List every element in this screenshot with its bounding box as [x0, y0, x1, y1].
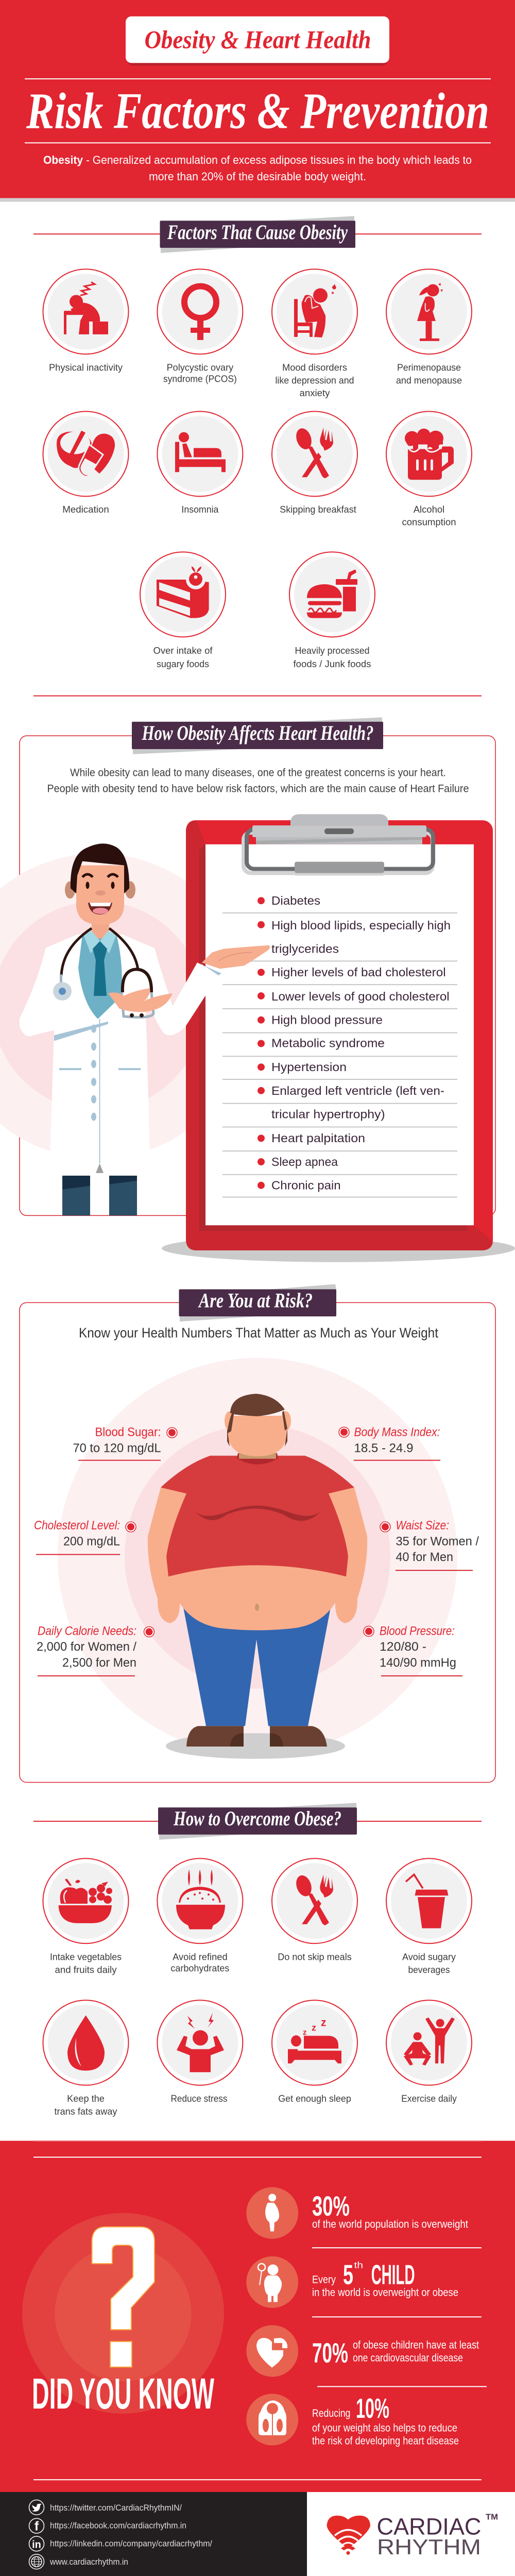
risk factor list: Enlarged left ventricle (left ven- — [271, 1084, 444, 1097]
linkedin link — [29, 2536, 212, 2551]
cause: perimenopause: and menopause — [396, 375, 462, 386]
footer: social links — [0, 2492, 307, 2576]
metric: blood sugar — [73, 1426, 177, 1461]
risk factor list: triglycerides — [271, 942, 339, 956]
linkedin link: in — [32, 2539, 41, 2550]
tip: avoid sugary beverages: Avoid sugary — [402, 1952, 456, 1962]
tip: reduce stress: Reduce stress — [171, 2094, 227, 2105]
shirt and tie — [78, 919, 122, 1019]
cause: medication: Medication — [62, 504, 109, 515]
metric: blood pressure: Blood Pressure: — [380, 1624, 455, 1638]
fact: 30 percent: 30% — [312, 2191, 350, 2222]
logo: cardiac rhythm: CARDIAC — [377, 2513, 481, 2539]
doctor head — [65, 843, 135, 925]
fact: 70 percent — [246, 2325, 479, 2377]
arms — [148, 1487, 367, 1623]
metric: daily calorie needs: Daily Calorie Needs: — [38, 1624, 136, 1638]
panel: did you know — [0, 2140, 515, 2492]
logo: cardiac rhythm: RHYTHM — [377, 2535, 481, 2559]
metric: blood sugar: 70 to 120 mg/dL — [73, 1442, 161, 1455]
risk factor list: Lower levels of good cholesterol — [271, 990, 450, 1003]
cause: mood disorders — [272, 269, 357, 399]
head — [225, 1411, 235, 1431]
risk subtitle: Know your Health Numbers That Matter as Much as Your Weight — [79, 1325, 438, 1341]
cause: sugary foods — [140, 552, 226, 670]
metric: daily calorie needs: 2,500 for Men — [62, 1656, 136, 1670]
subtitle: obesity and heart health: Obesity & Heart Health — [144, 26, 371, 54]
cause: sugary foods: Over intake of — [153, 646, 213, 656]
fact: 30 percent: of the world population is overweight — [312, 2218, 468, 2230]
cause: PCOS: syndrome (PCOS) — [163, 374, 237, 384]
clip — [244, 814, 433, 875]
risk factor list — [222, 894, 457, 1198]
tip: avoid sugary beverages — [386, 1858, 472, 1975]
section heading: are you at risk: Are You at Risk? — [198, 1289, 313, 1312]
risk factor list: High blood lipids, especially high — [271, 919, 451, 932]
obesity definition: Obesity - Generalized accumulation of excess adipose tissues in the body which leads to — [43, 154, 472, 166]
fact: reducing 10 percent: 10% — [356, 2393, 389, 2424]
twitter link — [29, 2500, 182, 2515]
risk factor list: Heart palpitation — [271, 1131, 365, 1145]
metric: cholesterol level: Cholesterol Level: — [34, 1519, 120, 1533]
t-shirt — [161, 1455, 354, 1577]
risk background circles — [58, 1358, 457, 1755]
fact: every 5th child: 5 — [343, 2260, 353, 2290]
trousers — [183, 1587, 331, 1726]
tip: reduce stress — [157, 2000, 243, 2105]
section heading: are you at risk — [179, 1284, 336, 1321]
panel: how obesity affects heart health — [0, 717, 515, 1262]
panel: are you at risk — [20, 1284, 495, 1783]
cause: perimenopause — [386, 269, 472, 386]
obesity definition: more than 20% of the desirable body weight. — [149, 170, 366, 183]
trousers — [62, 1176, 137, 1215]
metric: daily calorie needs: 2,000 for Women / — [37, 1640, 136, 1654]
section heading: how obesity affects heart health: How Obesity Affects Heart Health? — [142, 721, 373, 744]
cause: mood disorders: anxiety — [300, 388, 330, 399]
metric: blood pressure: 120/80 - — [380, 1640, 426, 1654]
logo: cardiac rhythm — [327, 2513, 498, 2559]
cause: skipping breakfast: Skipping breakfast — [280, 504, 356, 515]
metric: cholesterol level — [34, 1519, 136, 1555]
section heading: factors that cause obesity — [33, 216, 482, 253]
linkedin link: https://linkedin.com/company/cardiacrhythm/ — [50, 2538, 212, 2548]
cause: insomnia: Insomnia — [181, 504, 219, 515]
cause: mood disorders: like depression and — [275, 375, 354, 386]
cause: junk foods: Heavily processed — [295, 646, 370, 656]
metric: blood pressure: 140/90 mmHg — [380, 1656, 456, 1670]
tip: avoid sugary beverages: beverages — [408, 1964, 450, 1975]
website link — [29, 2554, 128, 2569]
risk factor list: Sleep apnea — [271, 1155, 338, 1168]
cause: alcohol consumption: Alcohol — [414, 504, 444, 515]
fact: reducing 10 percent: Reducing — [312, 2408, 350, 2419]
tip: vegetables and fruits: and fruits daily — [55, 1964, 117, 1975]
metric: cholesterol level: 200 mg/dL — [63, 1534, 120, 1548]
metric: body mass index: 18.5 - 24.9 — [354, 1442, 413, 1455]
metric: waist size — [380, 1519, 479, 1571]
tip: do not skip meals: Do not skip meals — [278, 1952, 352, 1962]
risk factor list: tricular hypertrophy) — [271, 1108, 385, 1121]
facebook link — [29, 2518, 186, 2534]
belly — [168, 1564, 346, 1630]
twitter link: https://twitter.com/CardiacRhythmIN/ — [50, 2503, 182, 2513]
overweight man illustration — [148, 1394, 367, 1759]
tip: refined carbohydrates: carbohydrates — [170, 1963, 229, 1974]
cause: physical inactivity: Physical inactivity — [49, 363, 123, 374]
cause: perimenopause: Perimenopause — [397, 363, 461, 374]
fact: every 5th child: th — [354, 2260, 363, 2270]
risk factor list: Higher levels of bad cholesterol — [271, 965, 446, 979]
white coat — [20, 935, 220, 1176]
section heading: how to overcome obese: How to Overcome Obese? — [173, 1807, 341, 1830]
obesity definition — [43, 154, 472, 183]
intro text: While obesity can lead to many diseases, one of the greatest concerns is your heart. — [70, 767, 446, 779]
cause: PCOS: Polycystic ovary — [167, 363, 234, 374]
tip: exercise daily: Exercise daily — [401, 2094, 457, 2105]
doctor background circles — [0, 854, 251, 1159]
tip: get enough sleep: z — [321, 2017, 327, 2029]
header banner — [0, 0, 515, 202]
fact: 30 percent — [246, 2187, 468, 2239]
tip: refined carbohydrates: Avoid refined — [173, 1952, 228, 1962]
shoes — [186, 1726, 327, 1747]
fact: every 5th child: CHILD — [371, 2260, 415, 2290]
doctor hands — [108, 945, 270, 1012]
stethoscope — [53, 928, 153, 1018]
facebook link: https://facebook.com/cardiacrhythm.in — [50, 2521, 186, 2531]
panel: prevention tips — [43, 1858, 472, 2117]
cause: medication — [43, 411, 129, 515]
tip: refined carbohydrates — [157, 1858, 243, 1974]
cause: insomnia — [157, 411, 243, 515]
tip: trans fats: Keep the — [67, 2094, 105, 2105]
cause: sugary foods: sugary foods — [157, 659, 209, 670]
metric: body mass index: Body Mass Index: — [354, 1426, 440, 1439]
tip: vegetables and fruits — [43, 1858, 129, 1975]
risk factor list: High blood pressure — [271, 1013, 383, 1027]
tip: trans fats: trans fats away — [54, 2107, 117, 2117]
did you know heading: DID YOU KNOW — [32, 2369, 214, 2418]
fact: reducing 10 percent: the risk of developing heart disease — [312, 2435, 459, 2447]
logo: cardiac rhythm: TM — [486, 2513, 498, 2522]
intro text — [47, 763, 470, 798]
tip: exercise daily — [386, 2000, 472, 2105]
metric: waist size: Waist Size: — [396, 1519, 449, 1533]
metric: waist size: 35 for Women / — [396, 1534, 479, 1548]
tip: vegetables and fruits: Intake vegetables — [50, 1952, 122, 1962]
fact: every 5th child: in the world is overweight or obese — [312, 2286, 458, 2298]
fact: reducing 10 percent — [246, 2393, 459, 2447]
question mark graphic — [22, 2213, 224, 2414]
tip: do not skip meals — [272, 1858, 357, 1962]
doctor illustration — [20, 843, 270, 1215]
fact: 70 percent: of obese children have at least — [353, 2340, 479, 2351]
risk factor list: Hypertension — [271, 1060, 347, 1074]
cause: physical inactivity — [43, 269, 129, 374]
metric: daily calorie needs — [37, 1624, 154, 1676]
tip: get enough sleep — [272, 2000, 357, 2105]
metric: waist size: 40 for Men — [396, 1550, 453, 1564]
metric: blood pressure — [364, 1624, 462, 1676]
fact: reducing 10 percent: of your weight also helps to reduce — [312, 2422, 457, 2434]
cause: PCOS — [157, 269, 243, 384]
cause: junk foods: foods / Junk foods — [293, 659, 371, 670]
clipboard — [162, 814, 515, 1262]
risk factor list: Metabolic syndrome — [271, 1036, 385, 1049]
cause: junk foods — [289, 552, 375, 670]
fact: every 5th child: Every — [312, 2274, 336, 2286]
facebook link: f — [35, 2519, 39, 2534]
risk factor list: Diabetes — [271, 894, 320, 907]
website link: www.cardiacrhythm.in — [49, 2557, 128, 2567]
panel: causes — [43, 269, 472, 670]
fact: 70 percent: 70% — [312, 2338, 348, 2369]
cause: alcohol consumption: consumption — [402, 517, 456, 528]
fact: every 5th child — [246, 2256, 458, 2308]
section heading: how obesity affects heart health — [132, 717, 383, 754]
tip: get enough sleep: z — [312, 2023, 316, 2033]
section heading: factors that cause obesity: Factors That Cause Obesity — [167, 221, 348, 244]
tip: trans fats — [43, 2000, 129, 2117]
risk factor list: Chronic pain — [271, 1179, 341, 1192]
intro text: People with obesity tend to have below risk factors, which are the main cause of Heart Failure — [47, 783, 469, 794]
cause: alcohol consumption — [386, 411, 472, 528]
metric: body mass index — [339, 1426, 440, 1461]
tip: get enough sleep: z — [303, 2028, 306, 2037]
cause: skipping breakfast — [272, 411, 357, 515]
tip: get enough sleep: Get enough sleep — [278, 2094, 351, 2105]
cause: mood disorders: Mood disorders — [282, 363, 347, 374]
section heading: how to overcome obese — [33, 1803, 482, 1840]
metric: blood sugar: Blood Sugar: — [95, 1426, 161, 1439]
fact: 70 percent: one cardiovascular disease — [353, 2352, 463, 2364]
